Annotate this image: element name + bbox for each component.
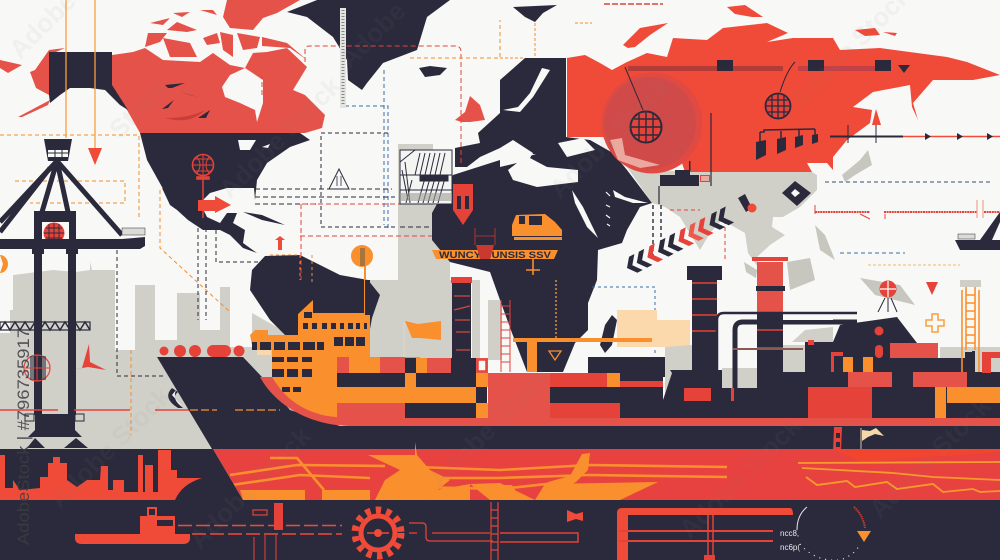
watermarks: Adobe Stock xyxy=(183,420,317,554)
icon: navy diamond xyxy=(782,181,811,206)
Asia: hierarchy chart xyxy=(756,129,818,160)
dashed route lines xyxy=(0,4,990,435)
watermarks: Adobe Stock xyxy=(213,70,347,204)
map: Japan and islands xyxy=(744,150,915,305)
ship windows xyxy=(252,312,367,392)
watermarks: Adobe Stock xyxy=(863,390,997,524)
dashed control lines xyxy=(178,526,342,534)
icon: warning triangle xyxy=(329,169,349,189)
watermarks: Adobe Stock xyxy=(543,70,677,204)
ship superstructure xyxy=(250,280,420,418)
map: Russia and northern Asia xyxy=(567,23,1000,172)
Madagascar xyxy=(600,315,617,353)
map: Svalbard xyxy=(513,5,557,22)
small right icons xyxy=(878,280,981,372)
pipe box xyxy=(500,533,578,542)
arrow: orange drop lines with red arrowhead xyxy=(66,0,102,165)
factory blocks xyxy=(684,326,1000,418)
Asia: route line with arrowheads xyxy=(830,109,1000,143)
dial gauge xyxy=(780,507,871,560)
anchor xyxy=(168,388,183,408)
icon: red tugboat xyxy=(75,507,190,544)
icon: rocket xyxy=(738,194,756,212)
icon: orange van xyxy=(512,214,562,240)
valve block xyxy=(253,503,283,560)
arrow: red direction marker xyxy=(198,196,231,213)
dial gauge: nc6p( xyxy=(780,543,800,552)
map: Africa and Middle East xyxy=(432,137,652,372)
orange wave lines xyxy=(798,462,1000,492)
watermarks: Adobe Stock xyxy=(673,410,807,544)
icon: red map marker on Africa xyxy=(453,184,473,225)
crane cabin block xyxy=(34,211,76,244)
red ball on mast xyxy=(878,280,897,312)
crane sign on Africa xyxy=(432,228,558,275)
orange flag xyxy=(404,321,441,358)
map: Greenland xyxy=(287,0,450,90)
orange ship silhouettes xyxy=(230,442,727,500)
watermarks: Stock xyxy=(103,73,175,144)
water line xyxy=(0,409,280,411)
chimney left xyxy=(687,266,722,375)
orange-red tower xyxy=(491,502,498,560)
icon: turbine xyxy=(61,344,106,372)
vertical stock credit: AdobeStock | #796735917 xyxy=(14,328,33,545)
icon: gear xyxy=(355,510,401,556)
red frame with crossbars xyxy=(617,508,793,560)
map: Europe xyxy=(455,58,566,167)
halo over central Asia xyxy=(602,72,702,174)
hull dashes xyxy=(190,409,280,411)
central tower chimney xyxy=(451,277,472,371)
icon: birds over Canada xyxy=(162,83,210,120)
hull red stripe xyxy=(260,377,1000,426)
map: Canada and arctic islands xyxy=(0,0,325,133)
map: Mediterranean, Black Sea, Red Sea, Baltic, Persian Gulf xyxy=(500,68,648,238)
map: Arctic coast islands xyxy=(623,5,897,48)
crane sign on Africa: WUNCY SUNSIS SSV xyxy=(439,250,551,260)
icon: scale tower on Greenland xyxy=(340,8,346,108)
icon: red flag xyxy=(567,510,583,522)
pale orange block xyxy=(617,310,690,347)
left navy band with red skyline xyxy=(0,449,243,500)
grey city skyline xyxy=(0,144,1000,450)
map: Alaska xyxy=(49,52,128,110)
icon: small red arrow Caribbean xyxy=(275,236,285,250)
red cargo band xyxy=(213,442,1000,500)
map: Baja peninsula xyxy=(162,188,177,210)
Asia: second globe xyxy=(766,62,795,118)
dial gauge: ncc8, xyxy=(780,529,799,538)
icon: orange beacon xyxy=(351,245,373,320)
map: Caspian tint xyxy=(610,138,660,168)
watermarks: Adobe Stock xyxy=(43,380,177,514)
bottom navy band xyxy=(0,500,1000,560)
map: South America xyxy=(250,255,380,340)
chimney right xyxy=(752,257,788,373)
bow dots xyxy=(160,345,244,357)
Asia: small factory and antenna xyxy=(659,113,711,204)
crane base xyxy=(28,414,82,437)
map: Hudson Bay xyxy=(222,68,263,122)
icon: globe pin on North America xyxy=(192,154,231,218)
chevron band xyxy=(623,206,734,276)
Asia: globe with pendant line xyxy=(625,67,662,142)
crane struts xyxy=(0,161,122,235)
truss beam xyxy=(0,322,90,330)
lower globe and wind turbine xyxy=(24,344,106,381)
connecting pipe xyxy=(409,523,493,541)
map: USA, Mexico and Central America xyxy=(140,133,310,253)
map: Iceland xyxy=(419,66,447,77)
bright red wedge xyxy=(833,449,1000,462)
Asia: rail bar with box markers xyxy=(628,60,910,73)
icon: warehouse sketch xyxy=(400,150,452,204)
red rail on the right xyxy=(815,200,1000,219)
factory pipes xyxy=(717,313,857,388)
left port crane xyxy=(0,139,145,448)
container stacks xyxy=(337,357,680,418)
red pin xyxy=(926,282,938,295)
bottom band icons xyxy=(75,502,871,560)
world map xyxy=(0,0,1000,372)
map: Arabian marks xyxy=(606,192,610,226)
red ladder xyxy=(501,300,510,372)
right factory silhouette xyxy=(663,257,1000,418)
crane boom xyxy=(0,237,145,249)
orange dock bar xyxy=(513,280,652,372)
crane columns xyxy=(34,249,76,415)
map: Cuba xyxy=(243,212,285,225)
orange cross xyxy=(926,314,944,332)
map: China and South-East Asia xyxy=(627,167,817,270)
ship hull xyxy=(157,345,1000,449)
map: British Isles xyxy=(455,96,485,122)
small bridge and pennant xyxy=(833,427,884,452)
crane cab xyxy=(44,139,72,161)
watermarks: Adobe Stock xyxy=(423,360,557,494)
orange ladder tower xyxy=(960,280,981,372)
orange dome icon edge xyxy=(0,255,8,273)
map: Great Lakes xyxy=(238,140,270,150)
right navy crane xyxy=(955,212,1000,250)
navy stack block xyxy=(588,357,665,377)
